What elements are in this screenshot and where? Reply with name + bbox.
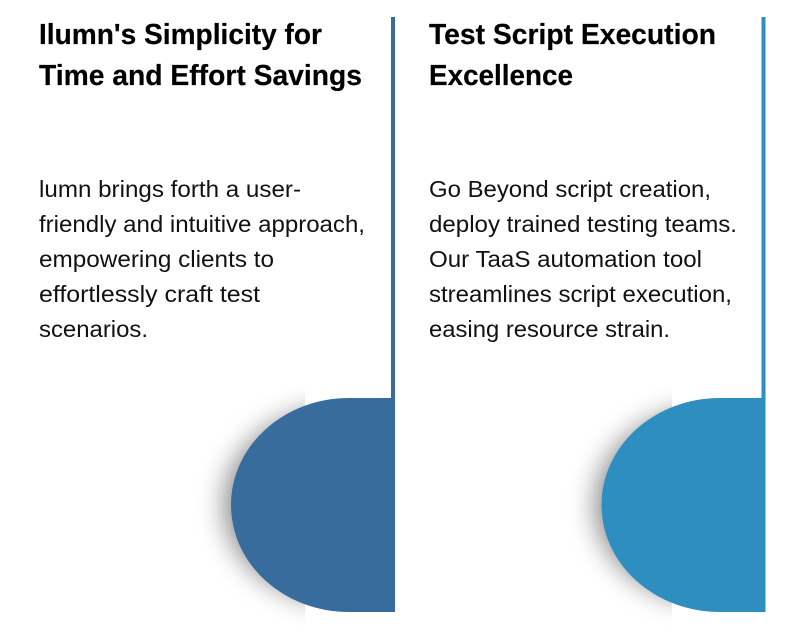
divider line: left [391, 17, 395, 402]
text block: left body: empowering clients to [39, 246, 274, 272]
text block: left body: friendly and intuitive approach, [39, 211, 365, 237]
heading: Ilumn's simplicity [39, 19, 362, 92]
shape: right half-round with shadow [595, 398, 787, 612]
heading: test script execution: Excellence [429, 60, 573, 92]
heading: test script execution [429, 19, 716, 92]
shape: left half-round with shadow [207, 394, 395, 616]
text block: left body: lumn brings forth a user- [39, 176, 301, 202]
text block: left body: effortlessly craft test [39, 281, 261, 307]
heading: test script execution: Test Script Execution [429, 19, 716, 51]
heading: Ilumn's simplicity: Ilumn's Simplicity for [39, 19, 322, 51]
text block: right body: Go Beyond script creation, [429, 176, 711, 202]
text block: left body [39, 176, 365, 342]
text block: right body: streamlines script execution, [429, 281, 732, 307]
panel: left column [39, 17, 395, 616]
divider line: right [762, 17, 766, 402]
text block: left body: scenarios. [39, 316, 148, 342]
text block: right body: easing resource strain. [429, 316, 670, 342]
text block: right body: Our TaaS automation tool [429, 246, 702, 272]
text block: right body [429, 176, 737, 342]
text block: right body: deploy trained testing teams. [429, 211, 737, 237]
panel: right column [429, 17, 787, 612]
heading: Ilumn's simplicity: Time and Effort Savings [39, 60, 362, 92]
